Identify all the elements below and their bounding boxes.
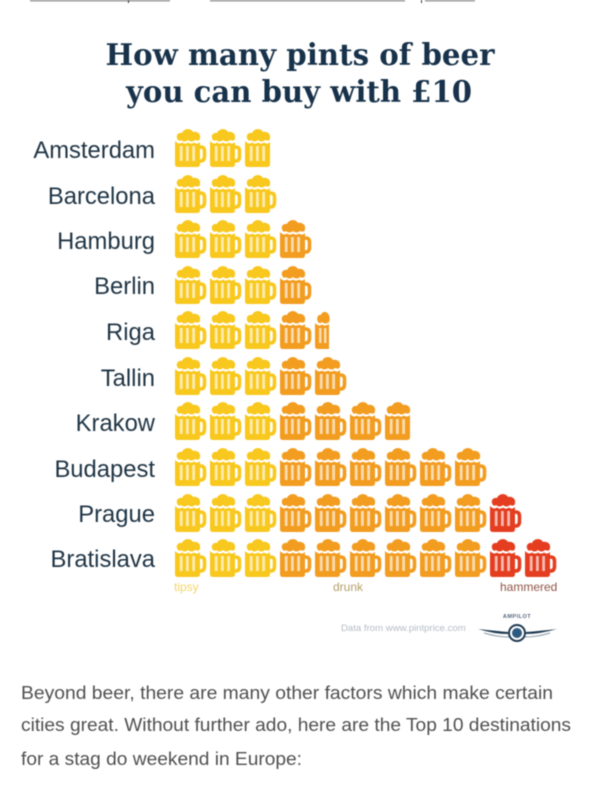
scale labels: hammered	[500, 580, 557, 594]
intro paragraph	[21, 683, 571, 769]
icon: Ampilot logo: AMPILOT	[503, 614, 531, 620]
icon: Ampilot logo	[478, 614, 557, 641]
clipped text line at top edge	[30, 0, 475, 3]
city labels: Barcelona	[48, 183, 156, 210]
scale labels	[174, 580, 557, 594]
intro paragraph: cities great. Without further ado, here are the Top 10 destinations	[21, 715, 571, 735]
scale labels: drunk	[333, 580, 364, 594]
row: Hamburg mugs	[175, 220, 310, 258]
row: Tallin mugs	[175, 357, 344, 395]
row: Amsterdam mugs	[175, 129, 270, 167]
city labels: Hamburg	[57, 228, 155, 255]
title	[106, 38, 496, 110]
intro paragraph: Beyond beer, there are many other factors which make certain	[21, 683, 553, 703]
city labels: Krakow	[76, 410, 156, 437]
city labels: Berlin	[94, 273, 155, 300]
title: How many pints of beer	[106, 38, 496, 73]
data source note: Data from www.pintprice.com	[341, 623, 466, 634]
row: Barcelona mugs	[175, 175, 274, 213]
city labels	[33, 137, 156, 573]
city labels: Prague	[78, 501, 155, 528]
row: Krakow mugs	[175, 402, 410, 440]
row: Budapest mugs	[175, 448, 484, 486]
row: Prague mugs	[175, 494, 520, 532]
city labels: Bratislava	[51, 546, 156, 573]
city labels: Budapest	[54, 456, 155, 483]
city labels: Amsterdam	[33, 137, 155, 164]
intro paragraph: for a stag do weekend in Europe:	[21, 749, 302, 769]
title: you can buy with £10	[125, 75, 472, 110]
scale labels: tipsy	[174, 580, 199, 594]
row: Bratislava mugs	[175, 539, 554, 577]
city labels: Riga	[106, 319, 156, 346]
row: Riga mugs	[175, 311, 330, 349]
city labels: Tallin	[101, 365, 155, 392]
row: Berlin mugs	[175, 266, 310, 304]
